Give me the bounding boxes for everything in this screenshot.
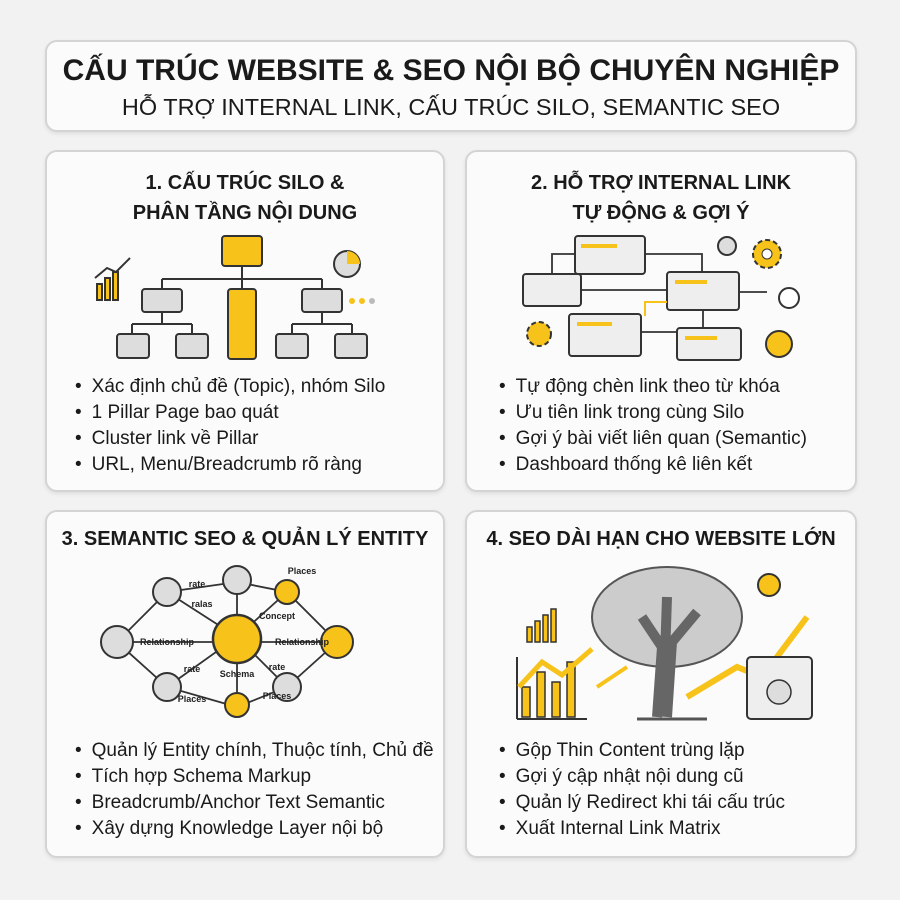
bullets: Ưu tiên link trong cùng Silo — [516, 402, 744, 423]
heading: 2. HỖ TRỢ INTERNAL LINK — [531, 172, 791, 194]
bullets: Gợi ý bài viết liên quan (Semantic) — [516, 428, 807, 449]
heading — [133, 170, 357, 224]
bullets: Gợi ý cập nhật nội dung cũ — [516, 766, 744, 787]
diagram: silo tree — [94, 235, 375, 360]
panel: semantic seo — [45, 510, 445, 858]
diagram: link flow — [522, 235, 800, 361]
bullets: Xác định chủ đề (Topic), nhóm Silo — [92, 376, 385, 397]
panel: long-term seo — [465, 510, 857, 858]
heading: 1. CẤU TRÚC SILO & — [146, 172, 344, 194]
bullets: Gộp Thin Content trùng lặp — [516, 740, 745, 761]
diagram: entity graph: rate — [269, 662, 285, 672]
bullets: Breadcrumb/Anchor Text Semantic — [92, 792, 385, 813]
bullets: Tích hợp Schema Markup — [92, 766, 311, 787]
heading: 3. SEMANTIC SEO & QUẢN LÝ ENTITY — [62, 528, 428, 550]
bullets — [76, 376, 385, 475]
bullets: Quản lý Entity chính, Thuộc tính, Chủ đề — [92, 740, 434, 761]
bullets: Xuất Internal Link Matrix — [516, 818, 721, 839]
diagram: entity graph: rate — [189, 579, 205, 589]
bullets: Cluster link về Pillar — [92, 428, 258, 449]
diagram: entity graph: Relationship — [140, 637, 194, 647]
panel: silo — [45, 150, 445, 492]
diagram: entity graph: rate — [184, 664, 200, 674]
diagram: entity graph: Concept — [259, 611, 295, 621]
diagram: entity graph: Relationship — [275, 637, 329, 647]
heading: PHÂN TẦNG NỘI DUNG — [133, 202, 357, 224]
bullets — [76, 740, 434, 839]
diagram: entity graph: Places — [288, 566, 316, 576]
heading: TỰ ĐỘNG & GỢI Ý — [572, 202, 750, 224]
heading — [531, 170, 791, 224]
bullets: Xây dựng Knowledge Layer nội bộ — [92, 818, 383, 839]
diagram: entity graph: Places — [263, 691, 291, 701]
title box — [45, 40, 857, 132]
bullets: 1 Pillar Page bao quát — [92, 402, 279, 423]
diagram: entity graph — [100, 565, 354, 718]
heading: 4. SEO DÀI HẠN CHO WEBSITE LỚN — [486, 528, 836, 550]
bullets: Tự động chèn link theo từ khóa — [516, 376, 780, 397]
panel: internal link — [465, 150, 857, 492]
bullets: URL, Menu/Breadcrumb rõ ràng — [92, 454, 362, 475]
bullets: Quản lý Redirect khi tái cấu trúc — [516, 792, 785, 813]
bullets: Dashboard thống kê liên kết — [516, 454, 752, 475]
diagram: tree and growth charts — [516, 566, 813, 720]
diagram: entity graph: Schema — [220, 669, 255, 679]
bullets — [500, 376, 807, 475]
bullets — [500, 740, 785, 839]
title: CẤU TRÚC WEBSITE & SEO NỘI BỘ CHUYÊN NGHIỆP — [63, 54, 839, 87]
diagram: entity graph: ralas — [191, 599, 213, 609]
diagram: entity graph: Places — [178, 694, 206, 704]
subtitle: HỖ TRỢ INTERNAL LINK, CẤU TRÚC SILO, SEMANTIC SEO — [122, 94, 780, 120]
